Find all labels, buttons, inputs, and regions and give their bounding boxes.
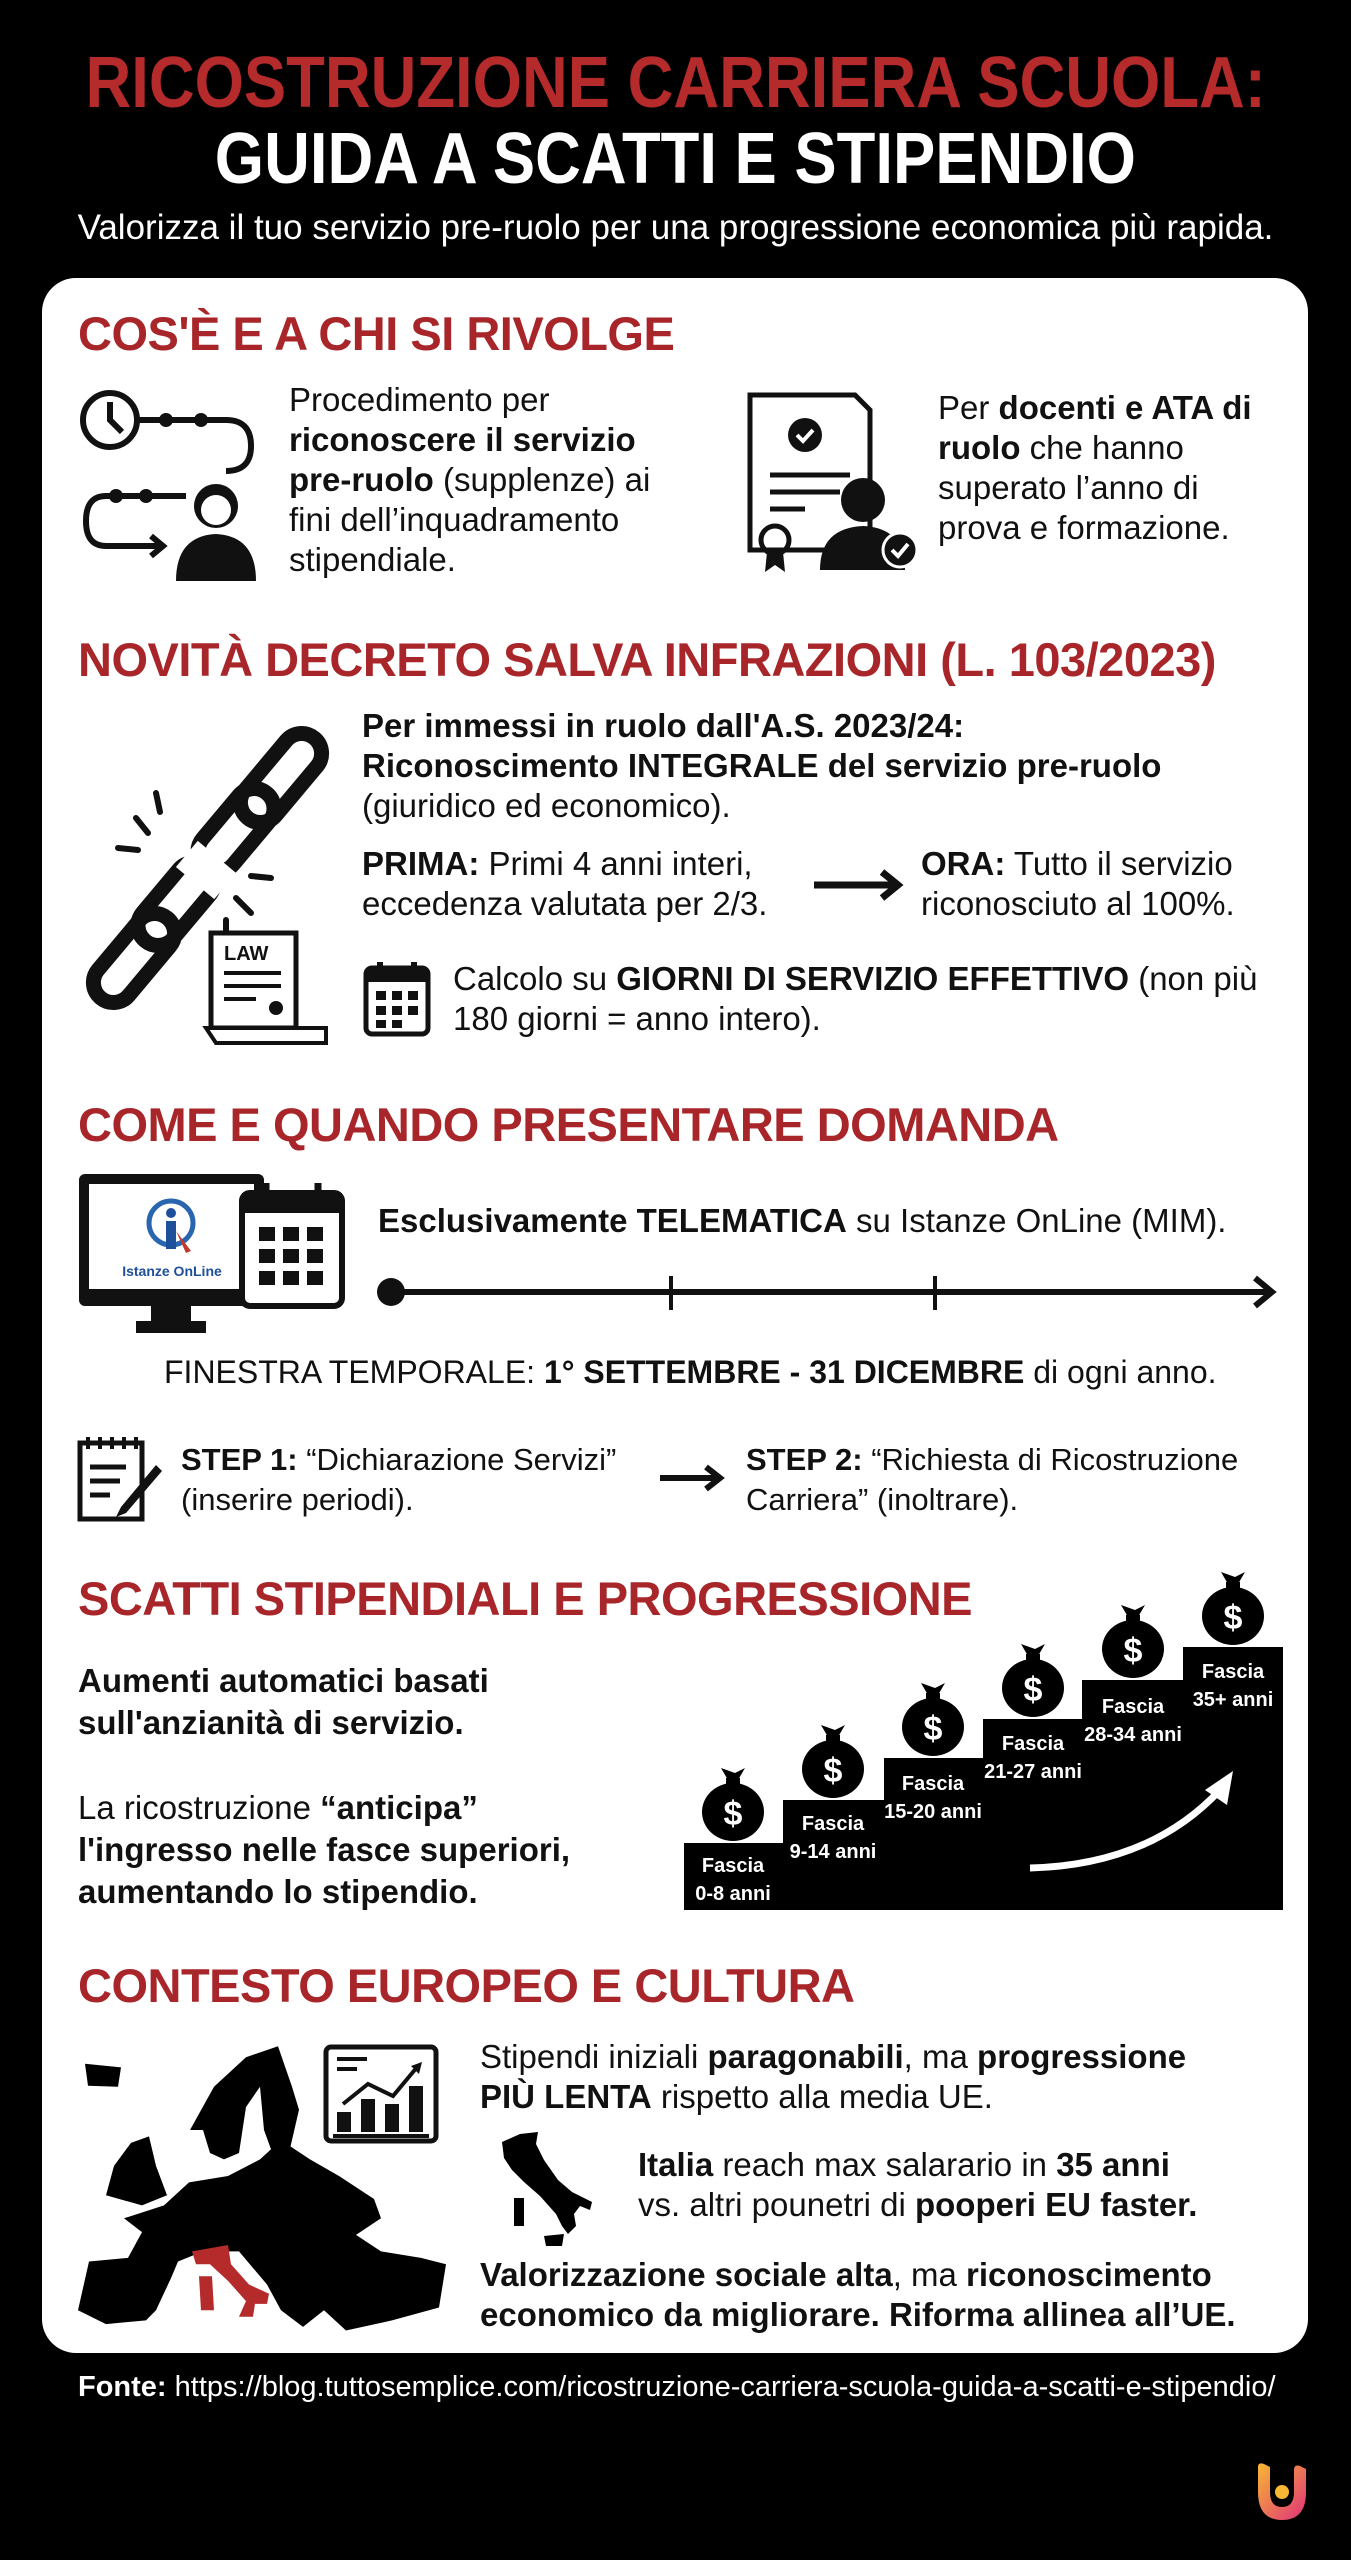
text: anticipa: aumentando lo stipendio. xyxy=(78,1873,478,1910)
text: step 1 xyxy=(181,1442,616,1517)
text: immessi: Per immessi in ruolo dall'A.S. 2023/24: xyxy=(362,707,964,744)
text: aumenti: sull'anzianità di servizio. xyxy=(78,1704,464,1741)
heading: contesto europeo: CONTESTO EUROPEO E CULTURA xyxy=(78,1959,854,2012)
text: procedimento: riconoscere il servizio xyxy=(289,421,636,458)
heading: cos'è: COS'È E A CHI SI RIVOLGE xyxy=(78,307,674,360)
chart: staircase: 28-34 anni xyxy=(1084,1724,1182,1746)
logo xyxy=(1258,2463,1306,2520)
chart: staircase: 0-8 anni xyxy=(695,1883,771,1905)
arrow step xyxy=(660,1464,725,1492)
icon: europe map xyxy=(78,2046,446,2330)
text: valorizzazione: Valorizzazione sociale alta, ma riconoscimento xyxy=(480,2256,1212,2293)
text: valorizzazione: economico da migliorare. Riforma allinea all’UE. xyxy=(480,2296,1236,2333)
text: calcolo: 180 giorni = anno intero). xyxy=(453,1000,821,1037)
chart: staircase: Fascia xyxy=(702,1855,765,1877)
text: per docenti: Per docenti e ATA di xyxy=(938,389,1252,426)
text: immessi: (giuridico ed economico). xyxy=(362,787,731,824)
title: GUIDA A SCATTI E STIPENDIO xyxy=(215,119,1136,199)
text: procedimento: stipendiale. xyxy=(289,541,456,578)
text: per docenti: superato l’anno di xyxy=(938,469,1199,506)
chart: staircase: Fascia xyxy=(902,1773,965,1795)
title xyxy=(85,43,1266,199)
icon: monitor istanze online xyxy=(79,1174,345,1333)
icon: timeline person xyxy=(80,390,256,581)
chart: staircase: 15-20 anni xyxy=(884,1801,982,1823)
text: prima: PRIMA: Primi 4 anni interi, xyxy=(362,845,753,882)
chart: staircase: 21-27 anni xyxy=(984,1761,1082,1783)
text: immessi xyxy=(362,707,1161,824)
chart: staircase: Fascia xyxy=(802,1813,865,1835)
text: italia: Italia reach max salarario in 35 anni xyxy=(638,2146,1170,2183)
text: stipendi iniziali xyxy=(480,2038,1186,2115)
text: finestra temporale: FINESTRA TEMPORALE: 1° SETTEMBRE - 31 DICEMBRE di ogni anno. xyxy=(164,1354,1217,1390)
text: aumenti: Aumenti automatici basati xyxy=(78,1662,489,1699)
subtitle: Valorizza il tuo servizio pre-ruolo per una progressione economica più rapida. xyxy=(78,208,1273,247)
heading: scatti: SCATTI STIPENDIALI E PROGRESSIONE xyxy=(78,1572,972,1625)
text: step 2: Carriera” (inoltrare). xyxy=(746,1482,1018,1517)
text: prima: eccedenza valutata per 2/3. xyxy=(362,885,767,922)
text: procedimento: Procedimento per xyxy=(289,381,549,418)
chart: staircase xyxy=(684,1572,1283,1910)
text: procedimento: fini dell’inquadramento xyxy=(289,501,619,538)
text: prima xyxy=(362,845,767,922)
icon: calendar xyxy=(364,962,430,1036)
text: step 2: STEP 2: “Richiesta di Ricostruzione xyxy=(746,1442,1238,1477)
icon: chart xyxy=(324,2044,438,2144)
text: telematica: Esclusivamente TELEMATICA su Istanze OnLine (MIM). xyxy=(378,1202,1226,1239)
text: procedimento xyxy=(289,381,650,578)
title: RICOSTRUZIONE CARRIERA SCUOLA: xyxy=(85,43,1266,123)
text: aumenti xyxy=(78,1662,489,1741)
chart: staircase: 35+ anni xyxy=(1193,1689,1273,1711)
text: calcolo xyxy=(453,960,1257,1037)
text: stipendi iniziali: PIÙ LENTA rispetto alla media UE. xyxy=(480,2078,993,2115)
text: calcolo: Calcolo su GIORNI DI SERVIZIO EFFETTIVO (non più xyxy=(453,960,1257,997)
icon: notepad pencil xyxy=(78,1437,162,1522)
text: ora xyxy=(921,845,1235,922)
main panel xyxy=(42,278,1308,2353)
text: per docenti xyxy=(938,389,1252,546)
text: italia: vs. altri pounetri di pooperi EU faster. xyxy=(638,2186,1197,2223)
text: anticipa: l'ingresso nelle fasce superiori, xyxy=(78,1831,570,1868)
text: step 1: (inserire periodi). xyxy=(181,1482,414,1517)
text: step 2 xyxy=(746,1442,1238,1517)
text: stipendi iniziali: Stipendi iniziali paragonabili, ma progressione xyxy=(480,2038,1186,2075)
icon: certificate xyxy=(748,392,916,572)
chart: staircase: Fascia xyxy=(1002,1733,1065,1755)
text: anticipa: La ricostruzione “anticipa” xyxy=(78,1789,478,1826)
heading: novità: NOVITÀ DECRETO SALVA INFRAZIONI (L. 103/2023) xyxy=(78,633,1216,686)
chart: staircase: 9-14 anni xyxy=(790,1841,876,1863)
icon: italy xyxy=(502,2132,592,2246)
timeline xyxy=(377,1276,1277,1310)
text: ora: ORA: Tutto il servizio xyxy=(921,845,1233,882)
text: step 1: STEP 1: “Dichiarazione Servizi” xyxy=(181,1442,616,1477)
heading: come e quando: COME E QUANDO PRESENTARE DOMANDA xyxy=(78,1098,1059,1151)
text: immessi: Riconoscimento INTEGRALE del servizio pre-ruolo xyxy=(362,747,1161,784)
text: italia xyxy=(638,2146,1197,2223)
arrow xyxy=(814,869,904,901)
text: per docenti: prova e formazione. xyxy=(938,509,1230,546)
icon: monitor istanze online: Istanze OnLine xyxy=(122,1263,222,1279)
icon: broken chain: LAW xyxy=(224,943,269,965)
text: per docenti: ruolo che hanno xyxy=(938,429,1184,466)
chart: staircase: Fascia xyxy=(1102,1696,1165,1718)
text: procedimento: pre-ruolo (supplenze) ai xyxy=(289,461,650,498)
chart: staircase: Fascia xyxy=(1202,1661,1265,1683)
footer source: Fonte: https://blog.tuttosemplice.com/ricostruzione-carriera-scuola-guida-a-scatti-e-stipendio/ xyxy=(78,2371,1276,2403)
text: anticipa xyxy=(78,1789,570,1910)
text: valorizzazione xyxy=(480,2256,1236,2333)
icon: broken chain xyxy=(86,726,330,1045)
text: ora: riconosciuto al 100%. xyxy=(921,885,1235,922)
